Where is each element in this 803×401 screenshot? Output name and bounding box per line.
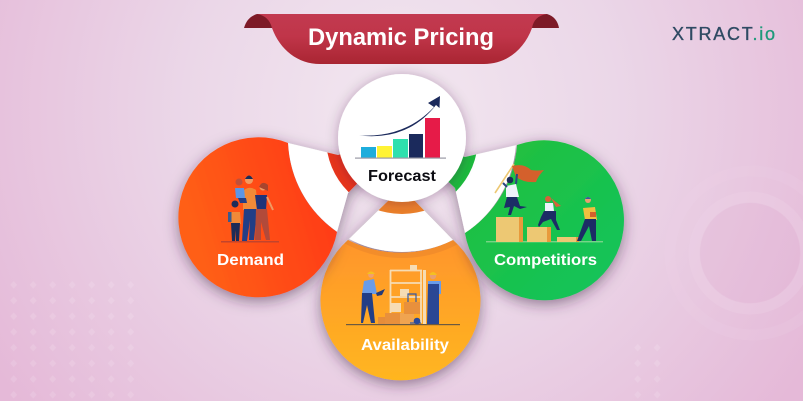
label: forecast: Forecast xyxy=(368,168,436,185)
label: availability: Availability xyxy=(361,337,449,354)
illustration: competitors on steps xyxy=(486,164,603,242)
panel: competitors xyxy=(440,135,634,314)
arrow xyxy=(359,96,440,136)
illustration: warehouse workers xyxy=(346,265,460,325)
panel: availability xyxy=(311,198,490,394)
panel: demand xyxy=(169,132,366,311)
panel: forecast xyxy=(338,74,466,202)
competitors white and green arc xyxy=(440,142,517,242)
illustration: family xyxy=(221,176,279,242)
label: demand: Demand xyxy=(217,252,284,269)
label: competitors: Competitiors xyxy=(494,252,597,269)
title banner xyxy=(244,14,559,64)
demand white and red arc xyxy=(288,140,366,240)
logo: XTRACT.io xyxy=(672,24,775,44)
title text: Dynamic Pricing xyxy=(308,24,494,51)
availability white and orange arc xyxy=(344,198,458,253)
bar chart xyxy=(355,118,446,159)
